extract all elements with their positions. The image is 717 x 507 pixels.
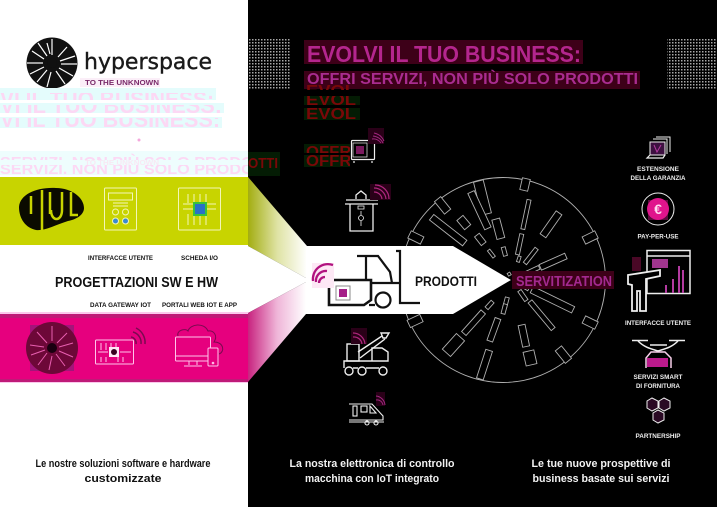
green band <box>0 177 248 245</box>
labels below centre: DATA GATEWAY IOT <box>90 302 151 309</box>
ghost red text on black <box>304 83 360 170</box>
ghost title on white <box>0 87 224 142</box>
labels above centre <box>88 255 218 262</box>
labels below centre <box>90 302 238 309</box>
icon: train wifi <box>376 392 385 406</box>
label: partnership: PARTNERSHIP <box>636 433 681 440</box>
labels above centre: INTERFACCE UTENTE <box>88 255 154 262</box>
caption: software hardware <box>36 458 210 485</box>
pink band <box>0 312 248 383</box>
icon: pink logo wheel <box>26 322 78 374</box>
servitization wheel <box>400 178 606 382</box>
ghost subtitle on white: TO THE UNKNOWN <box>85 160 159 167</box>
caption: servizi <box>532 458 670 485</box>
label: estensione <box>630 166 686 182</box>
icon: oven wifi <box>368 128 384 144</box>
caption: software hardware: Le nostre soluzioni software e hardware <box>36 458 210 470</box>
panel: white left background <box>0 0 248 507</box>
ghost red text on black: OFFRI <box>306 153 356 170</box>
icon: gateway circuit <box>96 328 145 364</box>
icon: crane truck <box>344 333 389 375</box>
arrow: prodotti <box>306 246 511 314</box>
icon: train <box>349 404 384 425</box>
panel: black right background <box>248 0 717 507</box>
icon: pay per use: € <box>654 201 662 217</box>
icon: warranty <box>647 137 670 158</box>
caption: servizi: Le tue nuove prospettive di <box>532 458 670 470</box>
label: servizi smart: DI FORNITURA <box>636 383 680 390</box>
ghost title on white: VI IL TUO BUSINESS: <box>0 93 222 118</box>
funnel pink <box>248 282 306 382</box>
ghost title on white: VI IL TUO BUSINESS: <box>0 87 214 112</box>
funnel white centre <box>248 246 306 313</box>
ghost subtitle on white: OTTI <box>248 155 278 172</box>
icon: forklift <box>329 251 420 308</box>
icon: person with dashboard <box>628 250 690 311</box>
arrow: prodotti: PRODOTTI <box>415 274 477 289</box>
label: estensione: ESTENSIONE <box>637 166 680 173</box>
ghost subtitle on white <box>0 151 280 178</box>
caption: elettronica: macchina con IoT integrato <box>305 473 439 485</box>
caption: software hardware: customizzate <box>84 473 162 485</box>
ghost title on white: VI IL TUO BUSINESS: <box>0 107 220 132</box>
labels below centre: PORTALI WEB IOT E APP <box>162 302 238 309</box>
icon: tank <box>345 191 378 231</box>
icon: chip board <box>178 188 220 230</box>
caption: elettronica: La nostra elettronica di controllo <box>290 458 455 470</box>
label: estensione: DELLA GARANZIA <box>630 175 686 182</box>
icon: partnership hexagons <box>647 398 670 423</box>
logo: hyperspace <box>26 38 212 88</box>
ghost red text on black: EVOL <box>306 106 356 123</box>
icon: forklift wifi <box>312 263 334 288</box>
icon: tank wifi <box>370 184 391 200</box>
ghost subtitle on white: SERVIZI, NON PIÙ SOLO PRODOTTI <box>0 160 278 178</box>
label: interfacce utente: INTERFACCE UTENTE <box>625 320 692 327</box>
ghost red text on black: EVOL <box>306 83 356 100</box>
label: servizi smart: SERVIZI SMART <box>634 374 683 381</box>
icon: oven <box>352 140 374 163</box>
icon: control panel <box>104 188 136 230</box>
title block: OFFRI SERVIZI, NON PIÙ SOLO PRODOTTI <box>307 69 638 88</box>
label: servizi smart <box>634 374 683 390</box>
servitization label: SERVITIZATION <box>516 274 612 290</box>
label: pay-per-use: PAY-PER-USE <box>638 234 679 240</box>
title block <box>304 40 640 89</box>
labels above centre: SCHEDA I/O <box>181 255 218 262</box>
funnel green <box>248 177 307 278</box>
caption: elettronica <box>290 458 455 485</box>
title block: EVOLVI IL TUO BUSINESS: <box>307 41 581 67</box>
dot grid left <box>248 38 290 89</box>
icon: crane wifi <box>351 328 367 344</box>
ghost red text on black: OFFRI <box>306 144 356 161</box>
logo: hyperspace: hyperspace <box>84 50 212 75</box>
icon: monitor and cloud <box>176 325 223 366</box>
icon: green logo blob <box>19 188 84 230</box>
icon: drone <box>632 340 685 368</box>
ghost subtitle on white: SERVIZI, NON PIÙ SOLO PRODOTTI <box>0 153 278 171</box>
dot grid right <box>667 38 717 89</box>
ghost red text on black: EVOL <box>306 92 356 109</box>
caption: servizi: business basate sui servizi <box>532 473 670 485</box>
logo: hyperspace: TO THE UNKNOWN <box>85 80 159 87</box>
heading: progettazioni: PROGETTAZIONI SW E HW <box>55 275 218 291</box>
icon: pay per use <box>642 193 674 225</box>
